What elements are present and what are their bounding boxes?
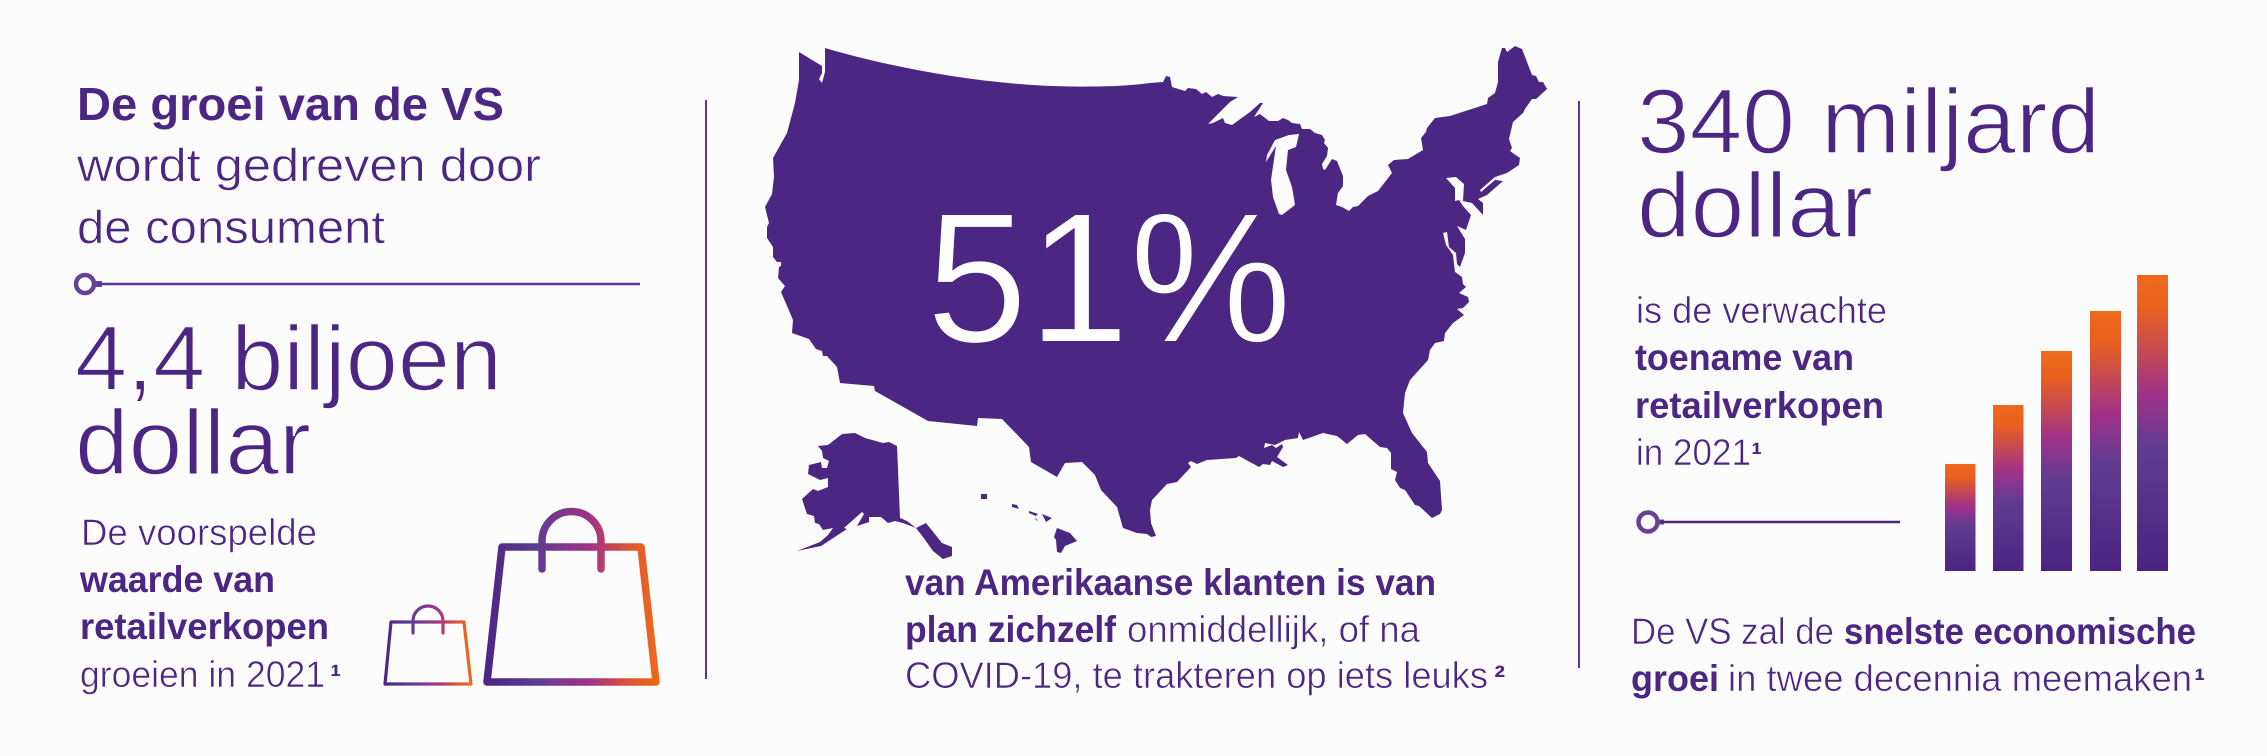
big number: 340 miljard dollar: 340 miljard: [1637, 71, 2100, 173]
text: fastest economic growth in two decades: snelste economische: [1844, 611, 2196, 652]
panel: left consumer growth: [75, 78, 656, 695]
icon: large shopping bag: [487, 512, 656, 682]
text: expected increase in retail sales: [1635, 290, 1887, 473]
divider: right: [1578, 101, 1580, 668]
panel: centre map: [765, 46, 1547, 696]
text: American customers plan to treat themselves: ²: [1494, 659, 1505, 695]
text: American customers plan to treat themselves: plan zichzelf: [905, 609, 1117, 650]
heading: De groei van de VS: de consument: [77, 201, 385, 253]
big number: 4,4 biljoen dollar: dollar: [75, 392, 311, 494]
text: fastest economic growth in two decades: [1631, 611, 2205, 699]
text: forecast retail sales value: waarde van: [79, 559, 275, 600]
panel: right retail sales increase: [1631, 71, 2205, 699]
Alaska: [797, 433, 952, 559]
text: fastest economic growth in two decades: ¹: [2194, 662, 2205, 698]
icon: small shopping bag: [385, 606, 471, 684]
text: forecast retail sales value: groeien in 2021: [80, 654, 325, 695]
text: fastest economic growth in two decades: groei: [1631, 658, 1719, 699]
text: fastest economic growth in two decades: De VS zal de: [1631, 611, 1834, 652]
big number: 51%: 51%: [926, 175, 1292, 382]
text: forecast retail sales value: ¹: [330, 658, 341, 694]
text: forecast retail sales value: retailverkopen: [80, 606, 329, 647]
heading: De groei van de VS: [76, 78, 541, 253]
text: American customers plan to treat themselves: onmiddellijk, of na: [1127, 609, 1420, 650]
text: expected increase in retail sales: is de verwachte: [1636, 290, 1887, 331]
text: American customers plan to treat themselves: van Amerikaanse klanten is van: [905, 562, 1436, 603]
big number: 340 miljard dollar: dollar: [1637, 155, 1873, 257]
text: expected increase in retail sales: toename van: [1635, 337, 1854, 378]
divider: left: [705, 100, 707, 679]
text: expected increase in retail sales: retailverkopen: [1635, 385, 1884, 426]
Hawaii: [981, 494, 1077, 553]
heading: De groei van de VS: wordt gedreven door: [76, 139, 541, 191]
bar chart: rising retail sales: [1945, 275, 2168, 571]
text: American customers plan to treat themselves: [905, 562, 1505, 696]
text: expected increase in retail sales: in 2021: [1636, 432, 1751, 473]
divider with ring marker: [1638, 512, 1900, 532]
big number: 4,4 biljoen dollar: 4,4 biljoen: [75, 308, 502, 410]
text: American customers plan to treat themselves: COVID-19, te trakteren op iets leuks: [905, 655, 1488, 696]
text: forecast retail sales value: De voorspelde: [81, 512, 317, 553]
text: expected increase in retail sales: ¹: [1751, 436, 1762, 472]
text: forecast retail sales value: [79, 512, 341, 695]
divider with ring marker: [76, 275, 640, 293]
heading: De groei van de VS: De groei van de VS: [77, 78, 504, 130]
big number: 340 miljard dollar: [1637, 71, 2100, 257]
map: United States with Alaska and Hawaii: [765, 46, 1547, 559]
Lake Michigan: [1266, 134, 1299, 215]
text: fastest economic growth in two decades: in twee decennia meemaken: [1728, 658, 2192, 699]
big number: 4,4 biljoen dollar: [75, 308, 502, 494]
